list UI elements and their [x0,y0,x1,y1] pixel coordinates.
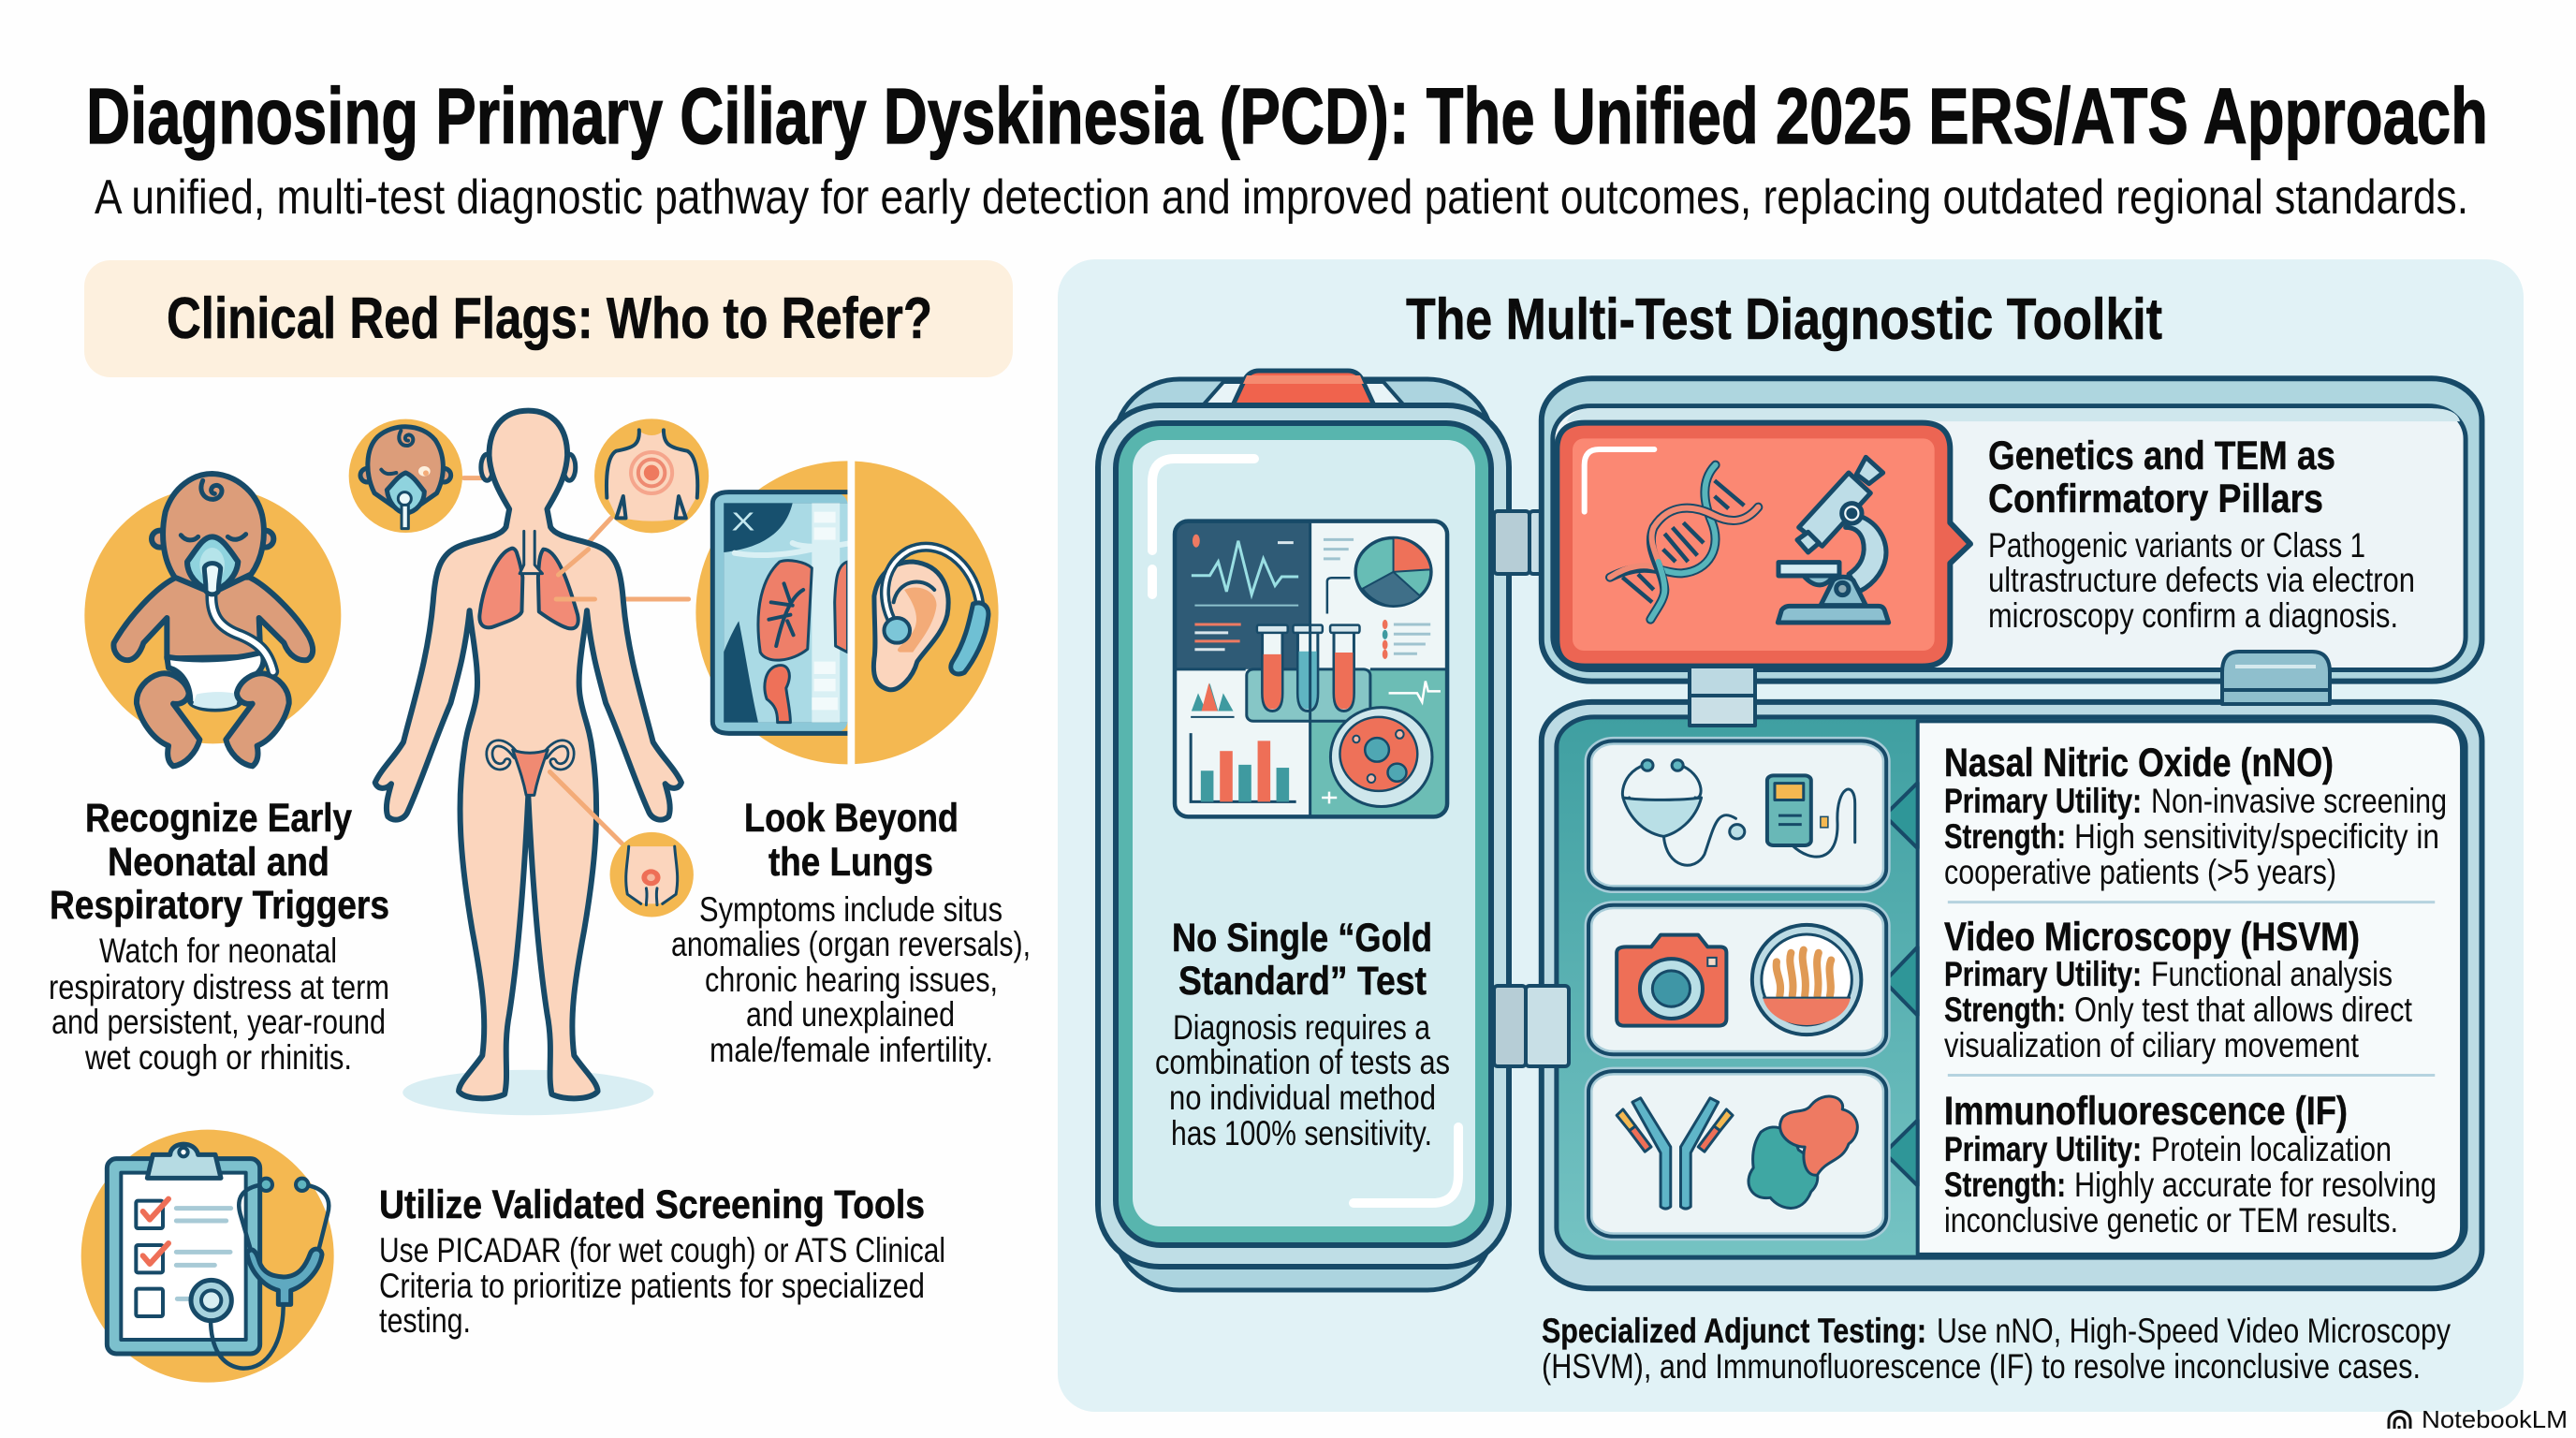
text block: recognize early triggers [49,796,389,1077]
ear with hearing device [873,547,988,690]
icon: stethoscope [1622,760,1745,865]
dividers [1948,902,2435,1076]
tube tray [1247,669,1370,721]
text block: validated screening tools: Use PICADAR (for wet cough) or ATS Clinical [379,1231,945,1269]
x-ray film: X [731,507,754,536]
heading: clinical red flags: Clinical Red Flags: Who to Refer? [167,286,932,351]
connector lines to body figure [463,478,689,599]
text block: nasal nitric oxide: Non-invasive screening [2151,782,2447,820]
text block: look beyond the lungs: male/female infertility. [710,1031,993,1069]
ears [481,454,493,480]
icon: pelvis [610,832,694,917]
connector line to pelvis [549,771,622,844]
body outline [375,411,681,1098]
text block: video microscopy: Functional analysis [2151,955,2393,993]
text block: video microscopy: Video Microscopy (HSVM) [1944,915,2360,960]
panel: clinical red flags [49,260,1031,1383]
icon: microscope [1778,457,1889,623]
text block: no single gold standard [1155,916,1450,1152]
panel: multi-test diagnostic toolkit [1058,259,2524,1412]
right ear [564,454,576,480]
footnote: specialized adjunct testing [1542,1312,2451,1386]
test tubes [1257,625,1359,711]
icon: camera [1617,935,1726,1026]
highlights [1152,459,1458,1203]
reproductive organs [490,743,571,795]
footnote: specialized adjunct testing: Use nNO, High-Speed Video Microscopy [1937,1312,2451,1350]
text block: immunofluorescence: Immunofluorescence (IF) [1944,1089,2348,1134]
watermark: NotebookLM: NotebookLM [2422,1405,2568,1433]
text block: video microscopy: Strength: [1944,990,2066,1029]
icon: chest with radiating pain [594,418,709,533]
red panel with genetics and microscope icons [1557,423,1970,667]
text block: recognize early triggers: and persistent, year-round [51,1003,386,1041]
text block: video microscopy [1944,915,2413,1064]
text block: nasal nitric oxide: cooperative patients (>5 years) [1944,853,2336,891]
handle [1233,371,1374,405]
petri dish [1330,708,1432,807]
icon: nitric oxide analyzer [1767,775,1855,857]
text block: nasal nitric oxide: Nasal Nitric Oxide (nNO) [1944,741,2334,785]
lungs and trachea [479,531,594,628]
illustration: human body figure [375,411,681,1115]
icon: cilia under lens [1752,925,1861,1034]
text block: no single gold standard: Standard” Test [1178,959,1427,1004]
icon: protein blob [1749,1096,1857,1208]
text block: genetics and TEM: Genetics and TEM as [1988,433,2335,478]
text block: nasal nitric oxide: Primary Utility: [1944,782,2142,820]
text block: genetics and TEM: Confirmatory Pillars [1988,477,2323,521]
icon: infant face with mask [349,419,462,533]
floor shadow [402,1070,653,1115]
x-ray film [711,456,855,768]
text block: look beyond the lungs: anomalies (organ reversals), [671,925,1031,963]
text block: look beyond the lungs: chronic hearing issues, [705,961,998,999]
icon: antibody [1617,1098,1733,1209]
text block: validated screening tools: testing. [379,1301,471,1340]
icon: dna helix [1610,465,1758,620]
text block: immunofluorescence [1944,1089,2437,1240]
case: specialized tests compartment [1542,702,2481,1288]
illustration: chest x-ray and ear [695,456,999,768]
shell body [1098,405,1509,1267]
card: HSVM icons [1588,905,1886,1054]
card: IF icons [1588,1071,1886,1237]
text block: immunofluorescence: Protein localization [2151,1130,2392,1168]
text block: recognize early triggers: wet cough or rhinitis. [84,1038,352,1077]
text block: video microscopy: visualization of ciliary movement [1944,1026,2360,1064]
text block: validated screening tools: Criteria to prioritize patients for specialized [379,1267,925,1305]
lid latch plate [1203,382,1404,405]
text block: immunofluorescence: Highly accurate for resolving [2074,1166,2437,1204]
heading: clinical red flags [84,260,1013,377]
case: confirmatory compartment [1542,378,2481,682]
text block: nasal nitric oxide [1944,741,2447,891]
icon: clipboard and stethoscope [81,1130,334,1383]
pie chart [1355,538,1431,606]
text block: look beyond the lungs: and unexplained [746,995,955,1034]
white text panel [1918,721,2462,1255]
text block: genetics and TEM [1988,433,2415,635]
text block: look beyond the lungs [671,796,1031,1069]
text block: no single gold standard: has 100% sensitivity. [1171,1114,1432,1152]
text block: recognize early triggers: Recognize Early [85,796,352,841]
text block: genetics and TEM: microscopy confirm a diagnosis. [1988,596,2398,635]
text block: immunofluorescence: Strength: [1944,1166,2066,1204]
text block: recognize early triggers: Respiratory Triggers [50,883,389,928]
footnote: specialized adjunct testing: (HSVM), and Immunofluorescence (IF) to resolve inconclusive cases. [1542,1347,2421,1386]
text block: genetics and TEM: Pathogenic variants or Class 1 [1988,526,2365,565]
text block: genetics and TEM: ultrastructure defects via electron [1988,561,2415,599]
text block: video microscopy: Only test that allows direct [2074,990,2413,1029]
text block: immunofluorescence: Primary Utility: [1944,1130,2142,1168]
text block: nasal nitric oxide: Strength: [1944,817,2066,856]
case: left tablet compartment [1098,371,1509,1290]
text block: recognize early triggers: respiratory distress at term [49,968,389,1006]
text block: immunofluorescence: inconclusive genetic or TEM results. [1944,1201,2398,1240]
text block: no single gold standard: combination of tests as [1155,1043,1450,1081]
pointer notches [1884,783,1918,1186]
text block: look beyond the lungs: Look Beyond [744,796,959,841]
text block: no single gold standard: Diagnosis requires a [1173,1008,1430,1047]
text block: validated screening tools: Utilize Validated Screening Tools [379,1182,925,1227]
back lid [1114,379,1493,1290]
illustration: baby with oxygen mask [84,474,341,766]
text block: video microscopy: Primary Utility: [1944,955,2142,993]
bar chart [1191,682,1296,801]
heading: toolkit: The Multi-Test Diagnostic Toolkit [1406,287,2162,352]
text block: recognize early triggers: Neonatal and [108,840,329,885]
text block: look beyond the lungs: the Lungs [768,840,933,885]
connector and clasp [1526,652,2330,1066]
footnote: specialized adjunct testing: Specialized Adjunct Testing: [1542,1312,1926,1350]
hinges between compartments [1494,511,1561,1066]
text block: look beyond the lungs: Symptoms include situs [699,890,1003,929]
text block: validated screening tools [379,1182,945,1340]
text block: nasal nitric oxide: High sensitivity/specificity in [2074,817,2439,856]
dashboard illustration [1175,521,1447,816]
text block: recognize early triggers: Watch for neonatal [99,932,337,970]
line chart [1192,541,1298,594]
text block: no single gold standard: No Single “Gold [1172,916,1432,961]
text block: no single gold standard: no individual method [1169,1078,1436,1117]
card: nNO icons [1588,741,1886,889]
